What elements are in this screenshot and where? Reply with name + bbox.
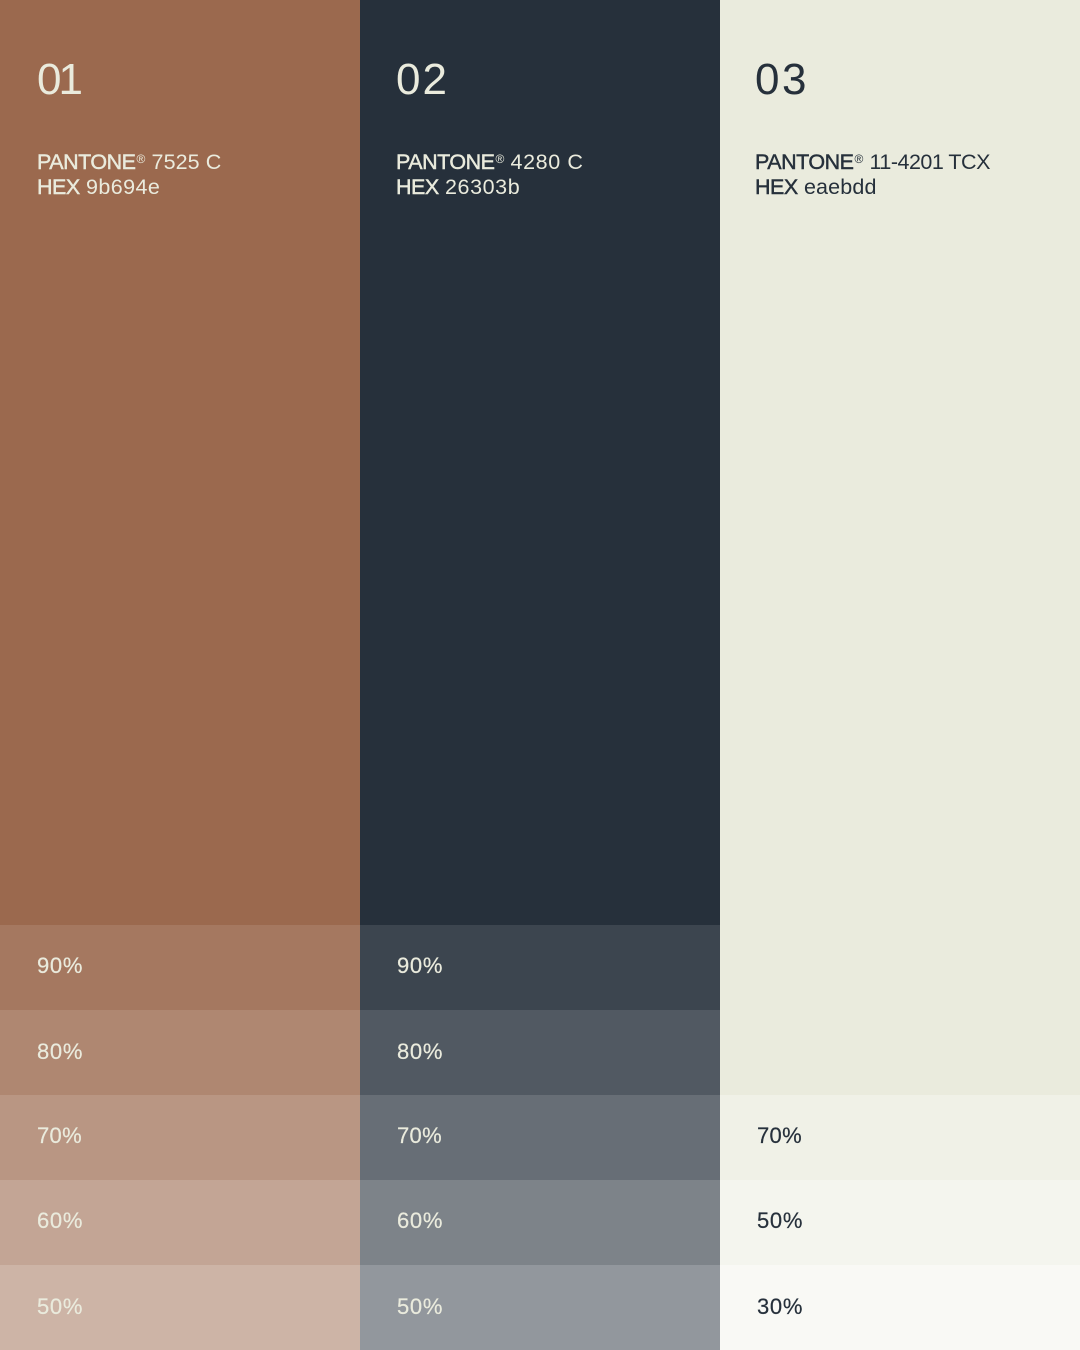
colour codes 01: PANTONE® 7525 C (37, 150, 221, 174)
number 02: 02 (396, 55, 449, 104)
colour codes 01 (37, 150, 221, 199)
tint 90%: 90% (37, 953, 83, 978)
tint 70% (0, 1095, 360, 1180)
tint 70%: 70% (397, 1123, 442, 1148)
number 03: 03 (755, 55, 809, 104)
colour codes 03: PANTONE® 11-4201 TCX (755, 150, 990, 174)
tint 60% (0, 1180, 360, 1265)
colour codes 03 (755, 150, 990, 199)
colour codes 01: HEX 9b694e (37, 175, 160, 199)
tint 70%: 70% (757, 1123, 802, 1148)
number 01: 01 (37, 55, 80, 104)
colour codes 03: HEX eaebdd (755, 175, 877, 199)
tint 80%: 80% (397, 1039, 443, 1064)
tint 80% (360, 1010, 720, 1095)
tint 50%: 50% (397, 1294, 443, 1319)
tint 60%: 60% (397, 1208, 443, 1233)
tint 50% (720, 1180, 1080, 1265)
tint 80% (0, 1010, 360, 1095)
tint 90%: 90% (397, 953, 443, 978)
panel: colour 02 navy (360, 0, 720, 1350)
tint 50%: 50% (37, 1294, 83, 1319)
tint 30%: 30% (757, 1294, 803, 1319)
colour codes 02 (396, 150, 583, 199)
tint 90% (360, 925, 720, 1010)
tint 50% (0, 1265, 360, 1350)
tint 60%: 60% (37, 1208, 83, 1233)
panel: colour 03 cream (720, 0, 1080, 1350)
tint 50% (360, 1265, 720, 1350)
tint 30% (720, 1265, 1080, 1350)
tint 60% (360, 1180, 720, 1265)
colour codes 02: HEX 26303b (396, 175, 520, 199)
tint 70% (720, 1095, 1080, 1180)
colour codes 02: PANTONE® 4280 C (396, 150, 583, 174)
tint 90% (0, 925, 360, 1010)
panel: colour 01 brown (0, 0, 360, 1350)
tint 70% (360, 1095, 720, 1180)
tint 50%: 50% (757, 1208, 803, 1233)
tint 70%: 70% (37, 1123, 82, 1148)
tint 80%: 80% (37, 1039, 83, 1064)
